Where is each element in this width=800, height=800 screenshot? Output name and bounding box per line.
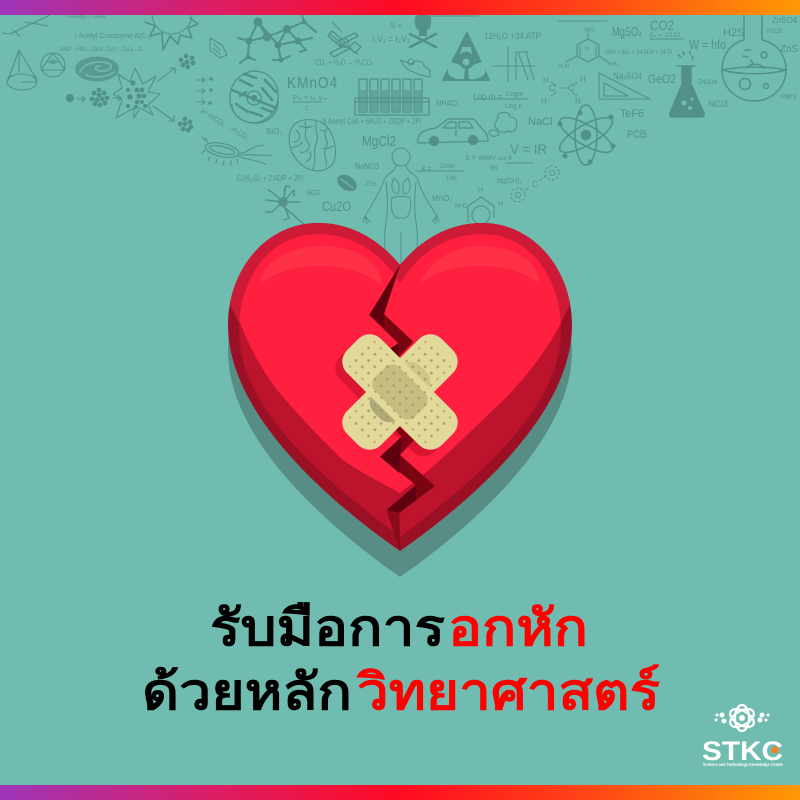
doodle: nuclear fission sequence	[66, 54, 213, 132]
formulas and chemical names: W = hfo	[689, 37, 726, 52]
formulas and chemical names: Log n	[505, 103, 523, 110]
formulas and chemical names: ΣWXi	[440, 164, 455, 170]
formulas and chemical names: CO₂ + H₂O → H₂CO₃	[315, 58, 374, 67]
formulas and chemical names: I₁V₁ = I₂V₂	[372, 34, 410, 44]
formulas and chemical names: Cu2O	[322, 198, 351, 214]
doodle: neuron	[266, 186, 306, 226]
formulas and chemical names: H	[543, 76, 549, 85]
logo atom mark	[714, 705, 770, 731]
formulas and chemical names: H	[541, 97, 547, 106]
doodle: molecule	[238, 15, 316, 63]
formulas and chemical names: Log m =	[473, 92, 502, 101]
doodle: rock	[210, 38, 227, 58]
formulas and chemical names: 2	[305, 106, 309, 112]
doodle: blood cell	[335, 172, 359, 194]
doodle: triangle ruler	[599, 73, 650, 99]
doodle: exhaust cloud	[489, 112, 517, 136]
bandage shadow on heart	[329, 334, 457, 463]
heart bright face	[239, 234, 561, 493]
formulas and chemical names: Na₂SO4	[613, 71, 642, 81]
formulas and chemical names: MnO₂	[432, 194, 452, 203]
upper bandage strip	[336, 328, 464, 456]
doodle: skull and crossbones	[410, 14, 436, 47]
formulas and chemical names: KMnO4	[287, 75, 338, 92]
doodle: carbon dioxide	[511, 166, 559, 202]
formulas and chemical names: CO2	[650, 17, 674, 33]
doodle: cell	[224, 66, 284, 128]
icon: radiation hazard	[443, 33, 489, 80]
doodle: human body	[363, 148, 439, 266]
doodle: graph	[493, 47, 535, 82]
formulas and chemical names: NH4Cl	[436, 99, 458, 108]
doodle: geometry pulley	[3, 15, 50, 36]
heart drop shadow	[228, 249, 572, 577]
formulas and chemical names: 2NH + 6O₂ + 34 ADP + 34 Pi	[605, 50, 672, 56]
formulas and chemical names: NaCl	[528, 116, 552, 128]
formulas and chemical names: GeO2	[648, 72, 676, 86]
doodle: ethene	[551, 82, 577, 96]
formulas and chemical names: I Acetyl Coenzyme A(C₂)	[75, 33, 152, 40]
title line 2: วิทยาศาสตร์	[356, 664, 660, 720]
formulas and chemical names: C	[532, 180, 538, 189]
top gradient bar	[0, 0, 800, 15]
formulas and chemical names: NCl3	[708, 99, 728, 109]
formulas and chemical names: PCl5	[627, 129, 647, 141]
formulas and chemical names: S =	[465, 155, 476, 162]
bottom gradient bar	[0, 785, 800, 800]
icon: round bottom flask	[722, 15, 786, 101]
doodle: circle with triangle	[41, 53, 65, 77]
formulas and chemical names: V = IR	[510, 141, 547, 157]
formulas and chemical names: 8B	[490, 166, 497, 172]
formulas and chemical names: TeF6	[620, 108, 644, 120]
doodle: triazine molecule	[566, 33, 608, 62]
icon: erlenmeyer flask	[670, 51, 704, 117]
formulas and chemical names: NH₂	[608, 62, 620, 68]
bandage	[329, 328, 464, 463]
formulas and chemical names: MgCl2	[362, 133, 396, 150]
formulas and chemical names: SO2	[306, 190, 320, 197]
title line 2: ด้วยหลัก	[142, 664, 352, 720]
formulas and chemical names: NaNO3	[355, 162, 379, 171]
formulas and chemical names: Logm	[506, 91, 524, 98]
formulas and chemical names: C₆H₁₂O₆ + 2 ADP + 2Pi	[237, 174, 303, 183]
title line 1: รับมือการ	[210, 600, 445, 656]
doodle: hand	[400, 59, 430, 77]
STKC logo	[702, 705, 783, 767]
formulas and chemical names: Pₘ = Iₘ Vₘ	[293, 95, 327, 102]
formulas and chemical names: 8 Acetyl CoA + 6H₂O + 2ADP + 2Pi	[323, 117, 421, 126]
icon: atom	[555, 105, 617, 165]
formulas and chemical names: H2S	[723, 27, 744, 39]
formulas and chemical names: ZnSO4	[698, 80, 718, 86]
crack	[369, 265, 435, 551]
formulas and chemical names: Eₙ = -13.12	[650, 33, 681, 39]
formulas and chemical names: S =	[390, 21, 403, 30]
doodle: galaxy	[75, 56, 119, 82]
right gloss highlight	[419, 246, 539, 284]
formulas and chemical names: H	[478, 187, 483, 194]
doodle: bacterium	[202, 137, 272, 165]
left gloss highlight	[261, 246, 381, 285]
heart inner lower face	[239, 234, 561, 537]
formulas and chemical names: H-C	[455, 203, 467, 210]
formulas and chemical names: H	[580, 75, 586, 84]
formulas and chemical names: ZnSO4	[772, 16, 798, 25]
doodle: satellite	[328, 22, 361, 57]
formulas and chemical names: H₂N	[558, 64, 569, 70]
formulas and chemical names: H⁺+HCO₃⁻→H₂CO₃	[199, 107, 250, 142]
formulas and chemical names: O	[549, 169, 555, 178]
title line 2	[142, 664, 660, 720]
formulas and chemical names: 12H₂O +34 ATP	[484, 31, 541, 41]
formulas and chemical names: I Acetyl ↓ CoA	[65, 13, 106, 20]
formulas and chemical names: NAD⁺→FMD→Cyt.b→Cyt.c→Cyt.a→O₂	[60, 46, 143, 53]
formulas and chemical names: H	[575, 97, 581, 106]
formulas and chemical names: Mg(OH)₂	[497, 178, 522, 185]
formulas and chemical names: MgSO₄	[612, 24, 642, 39]
title	[142, 600, 660, 720]
formulas and chemical names: ZnS	[780, 44, 799, 55]
formulas and chemical names: C	[549, 83, 556, 93]
title line 1: อกหัก	[448, 600, 588, 656]
formulas and chemical names: 8RMV cos θ	[479, 156, 512, 162]
doodle: benzene ring	[468, 197, 494, 224]
doodle: physics fractions	[293, 9, 683, 171]
lower bandage strip	[336, 328, 464, 456]
formulas and chemical names: ΣWi	[446, 176, 457, 182]
formulas and chemical names: X̄ =	[421, 165, 432, 173]
formulas and chemical names	[60, 13, 799, 214]
heart dark rim	[228, 223, 572, 551]
doodle: test tube rack	[355, 79, 429, 115]
logo wordmark: STKC	[702, 736, 783, 766]
heart upper rim	[230, 223, 570, 323]
doodle: sun	[145, 0, 198, 50]
formulas and chemical names: H	[498, 201, 503, 208]
formulas and chemical names: N	[585, 46, 589, 52]
title line 1	[210, 600, 588, 656]
doodle: cone	[7, 50, 37, 90]
formulas and chemical names: Zns	[365, 181, 377, 188]
formulas and chemical names: C	[568, 83, 575, 93]
formulas and chemical names: PBr3	[781, 94, 797, 101]
formulas and chemical names: P2O5	[767, 29, 783, 35]
broken heart with bandage	[228, 223, 572, 577]
logo tagline: Science and Technology Knowledge Center	[703, 762, 783, 767]
science doodles	[3, 0, 799, 266]
doodle: brain	[289, 120, 335, 171]
doodle: car	[418, 119, 488, 146]
logo orange dot	[772, 746, 778, 754]
formulas and chemical names: SiO₂	[266, 127, 282, 136]
formulas and chemical names: O	[515, 191, 521, 200]
formulas and chemical names: NH₂	[585, 28, 597, 34]
